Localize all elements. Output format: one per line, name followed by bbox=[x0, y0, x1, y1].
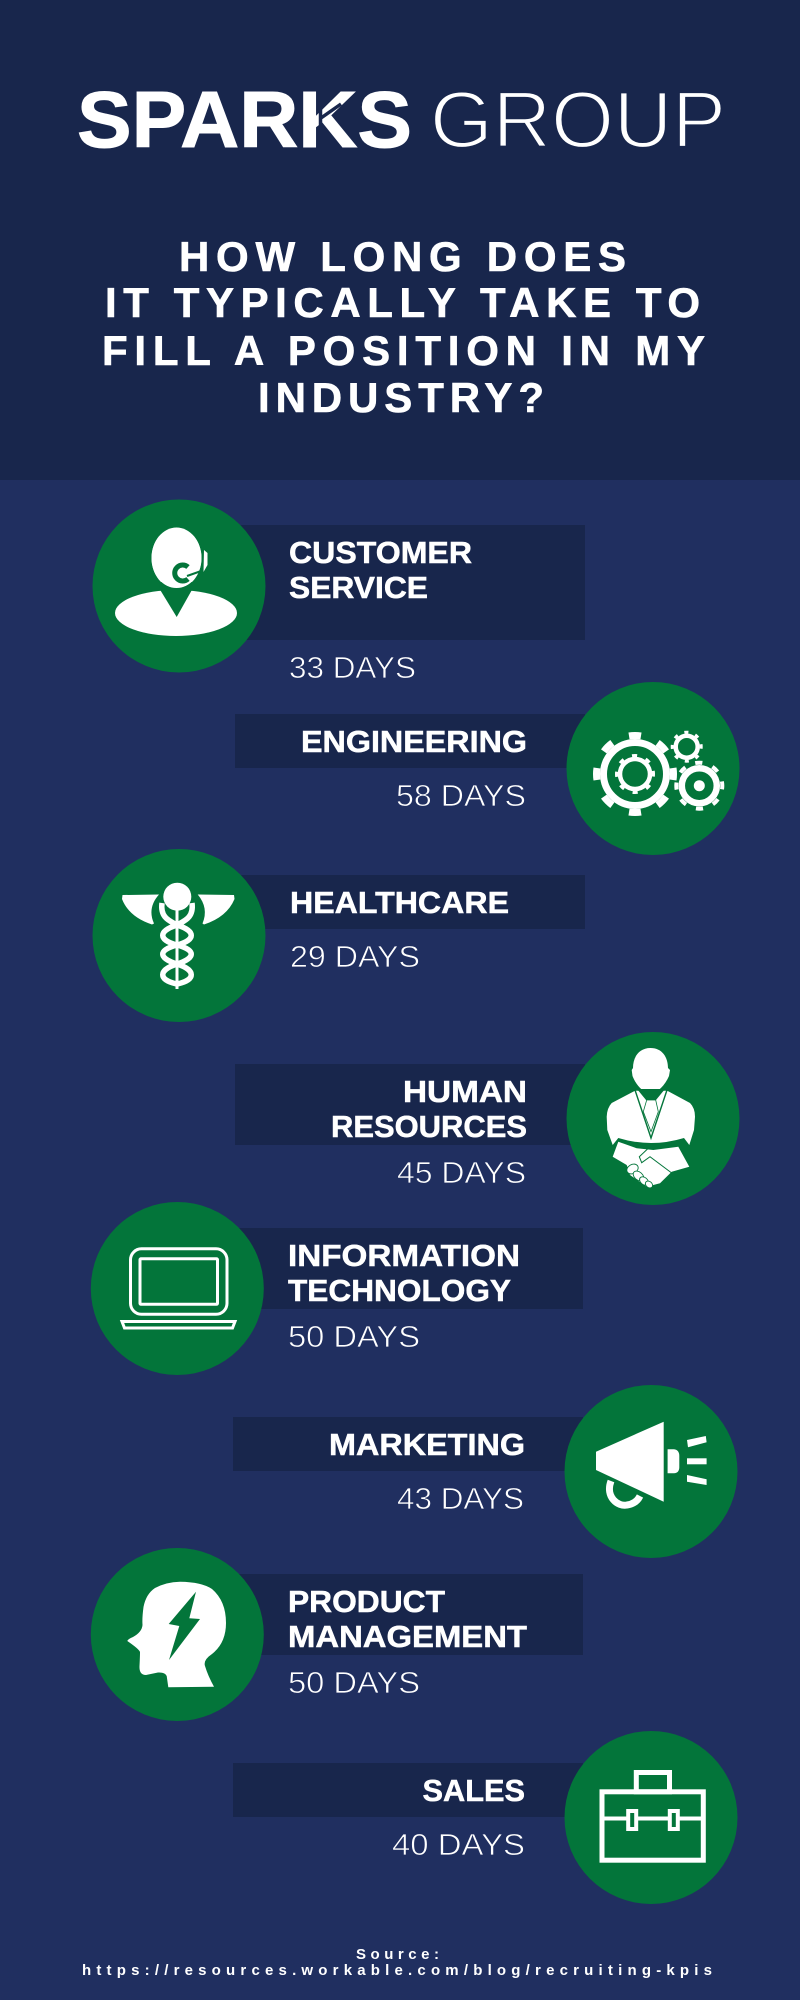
row: customer service bbox=[92, 500, 585, 685]
value: 50 days: 50 DAYS bbox=[288, 1665, 420, 1700]
label: information technology bbox=[288, 1238, 520, 1308]
value: 58 days: 58 DAYS bbox=[396, 778, 526, 813]
value: 29 days: 29 DAYS bbox=[290, 939, 420, 974]
row: sales bbox=[233, 1731, 738, 1904]
label: information technology: TECHNOLOGY bbox=[288, 1273, 511, 1308]
icon: agent with headset bbox=[115, 528, 237, 636]
title: IT TYPICALLY TAKE TO bbox=[105, 279, 700, 326]
row: product management bbox=[91, 1548, 583, 1721]
logo: Sparks Group bbox=[77, 75, 726, 164]
logo: Sparks Group: SPARKS bbox=[77, 75, 412, 164]
icon: caduceus bbox=[122, 883, 234, 989]
title bbox=[102, 233, 705, 421]
source note: https://resources.workable.com/blog/recruiting-kpis bbox=[82, 1962, 712, 1979]
row: healthcare bbox=[92, 849, 585, 1022]
label: engineering: ENGINEERING bbox=[301, 724, 527, 759]
label: product management: MANAGEMENT bbox=[288, 1619, 527, 1654]
icon: briefcase bbox=[602, 1772, 703, 1860]
row: information technology bbox=[91, 1202, 583, 1375]
label: human resources: HUMAN bbox=[403, 1074, 527, 1109]
icon: businessman handshake bbox=[607, 1048, 695, 1189]
row: human resources bbox=[235, 1032, 740, 1205]
label: human resources bbox=[331, 1074, 527, 1144]
label: customer service: SERVICE bbox=[289, 570, 428, 605]
label: marketing: MARKETING bbox=[329, 1427, 525, 1462]
icon: head with lightning bolt bbox=[127, 1582, 226, 1687]
icon: gears bbox=[596, 732, 722, 812]
value: 33 days: 33 DAYS bbox=[289, 650, 416, 685]
label: information technology: INFORMATION bbox=[288, 1238, 520, 1273]
title: FILL A POSITION IN MY bbox=[102, 327, 705, 374]
row: engineering bbox=[235, 682, 740, 855]
icon: laptop bbox=[122, 1249, 235, 1328]
value: 43 days: 43 DAYS bbox=[397, 1481, 524, 1516]
header panel bbox=[0, 0, 800, 480]
label: customer service bbox=[289, 535, 472, 605]
source note bbox=[82, 1946, 712, 1979]
label: healthcare: HEALTHCARE bbox=[290, 885, 509, 920]
title: INDUSTRY? bbox=[258, 374, 544, 421]
value: 45 days: 45 DAYS bbox=[397, 1155, 526, 1190]
title: HOW LONG DOES bbox=[179, 233, 626, 280]
label: human resources: RESOURCES bbox=[331, 1109, 527, 1144]
label: customer service: CUSTOMER bbox=[289, 535, 472, 570]
label: sales: SALES bbox=[422, 1773, 525, 1808]
value: 50 days: 50 DAYS bbox=[288, 1319, 420, 1354]
icon: megaphone bbox=[596, 1422, 707, 1505]
label: product management: PRODUCT bbox=[288, 1584, 445, 1619]
logo: Sparks Group: GROUP bbox=[430, 75, 726, 164]
value: 40 days: 40 DAYS bbox=[392, 1827, 525, 1862]
row: marketing bbox=[233, 1385, 738, 1558]
source note: Source: bbox=[356, 1946, 439, 1963]
label: product management bbox=[288, 1584, 527, 1654]
